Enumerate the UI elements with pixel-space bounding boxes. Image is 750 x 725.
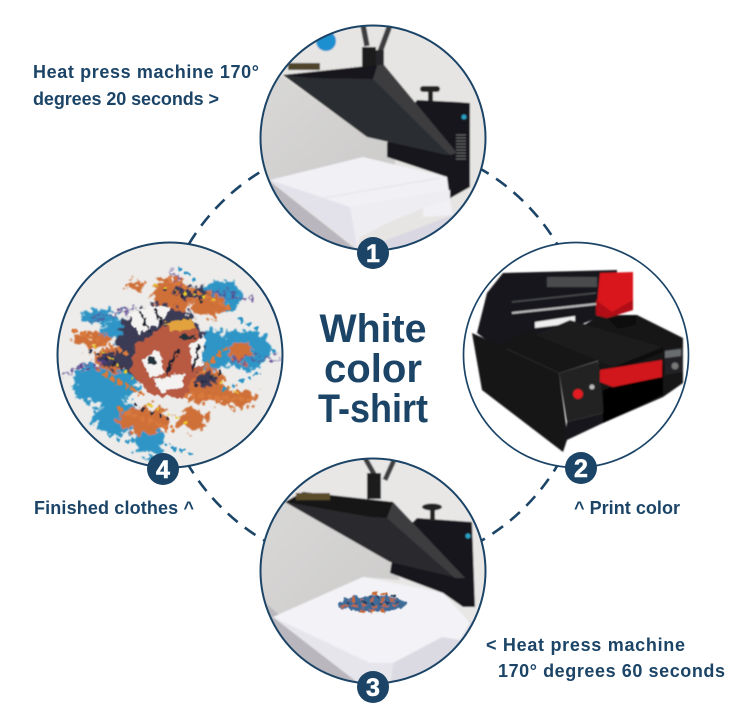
number badge 4 [147,453,179,485]
upper unit [477,270,617,350]
number badge 1: 1 [366,240,380,268]
number badge 3: 3 [366,674,380,702]
small shirt print [338,594,406,612]
caption: step 2: ^ Print color [574,498,680,518]
floor [392,620,472,680]
right base [584,314,684,423]
plate [285,492,465,578]
photo circle 1: heat press with blank shirt [255,25,490,251]
sticker [316,31,336,51]
caption: step 1 [33,62,259,109]
red head [596,272,633,318]
caption: step 3: 170° degrees 60 seconds [498,661,725,681]
center title: T-shirt [318,387,428,431]
center title: color [324,347,422,391]
caption: step 1: degrees 20 seconds > [33,89,219,109]
front panel [559,361,604,422]
wall [262,502,400,614]
red tray [600,360,662,387]
base top [476,334,598,374]
table [535,320,663,367]
caption: step 3: < Heat press machine [486,635,685,655]
dark core [100,287,214,387]
number badge 1 [357,237,389,269]
photo circle 4: finished clothes, tiger splatter print [57,242,283,468]
plate [283,65,457,155]
number badge 2: 2 [574,455,588,483]
purple streaks [62,270,280,375]
floor [384,215,453,248]
orange splash [72,278,258,433]
caption: step 3 [486,635,725,681]
dashed connecting ring [158,140,588,570]
center title: White [320,307,426,351]
control panel [665,347,683,375]
photo circle 2: printer [463,242,689,468]
left face [472,333,567,452]
tiger face [128,305,205,398]
wall below plate [262,76,396,182]
number badge 3 [357,671,389,703]
shirt [271,156,453,217]
caption: step 1: Heat press machine 170° [33,62,259,82]
blue splash base [73,281,271,456]
tower [390,518,475,607]
center title [318,307,428,431]
caption: step 4: Finished clothes ^ [34,498,194,518]
number badge 4: 4 [156,456,170,484]
shirt [273,577,470,663]
number badge 2 [565,452,597,484]
photo circle 3: heat press with printed shirt [255,458,490,690]
speckle layer [75,268,275,455]
tower [387,100,470,200]
opening [603,365,663,423]
